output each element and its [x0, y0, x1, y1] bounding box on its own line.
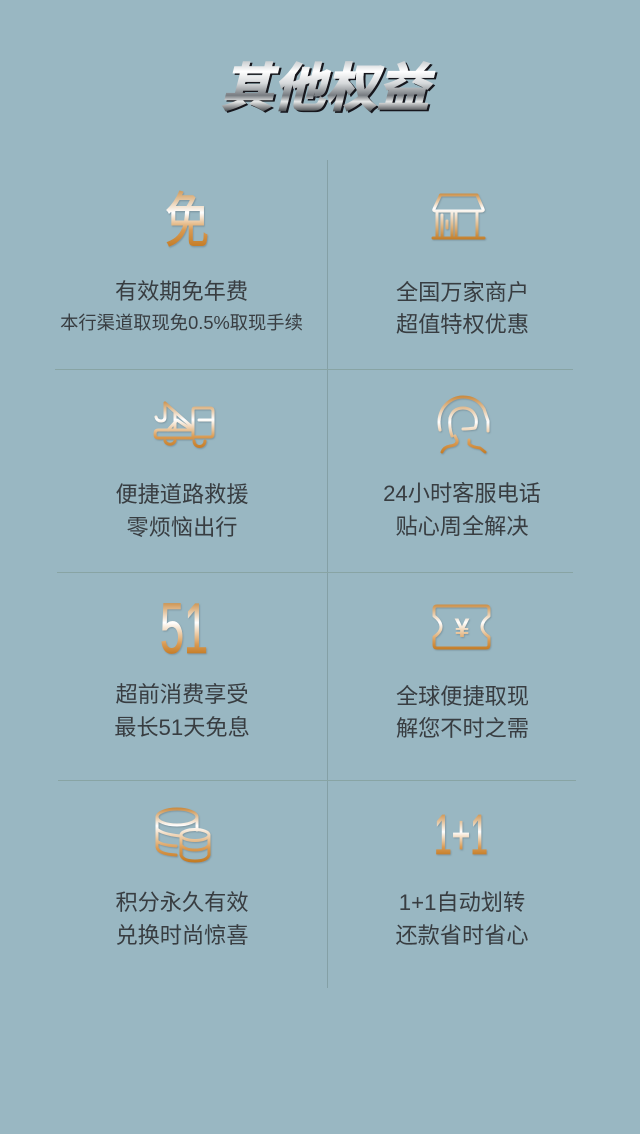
icon: storefront — [433, 195, 484, 238]
text: auto repayment: 还款省时省心 — [395, 923, 529, 948]
text: roadside rescue — [115, 482, 249, 540]
text: customer service: 贴心周全解决 — [395, 514, 529, 539]
text: annual fee waiver: 本行渠道取现免0.5%取现手续 — [60, 312, 303, 333]
text: points — [115, 890, 249, 948]
icon: yen ticket: ¥ — [454, 613, 470, 643]
text: auto repayment: 1+1自动划转 — [399, 890, 525, 915]
text: interest free: 超前消费享受 — [115, 682, 249, 707]
panel: auto repayment — [395, 803, 529, 948]
text: points: 兑换时尚惊喜 — [115, 923, 249, 948]
text: interest free: 最长51天免息 — [114, 715, 250, 740]
title: 其他权益 — [218, 60, 441, 118]
panel: annual fee waiver — [60, 188, 303, 333]
text: roadside rescue: 零烦恼出行 — [127, 515, 237, 540]
text: interest free — [114, 682, 250, 740]
panel: customer service — [383, 397, 541, 539]
text: annual fee waiver — [60, 279, 303, 333]
panel: merchants — [396, 195, 529, 337]
text: global withdrawal: 全球便捷取现 — [396, 684, 529, 709]
text: merchants: 全国万家商户 — [396, 280, 529, 305]
panel: roadside rescue — [115, 403, 249, 540]
text: customer service: 24小时客服电话 — [383, 481, 541, 506]
panel: points — [115, 809, 249, 948]
text: roadside rescue: 便捷道路救援 — [115, 482, 249, 507]
icon: tow truck — [155, 403, 213, 447]
text: annual fee waiver: 有效期免年费 — [115, 279, 248, 304]
icon: 51 days: 51 — [160, 590, 208, 669]
icon: 1+1: 1+1 — [434, 803, 488, 867]
icon: coin stacks — [157, 809, 209, 861]
text: merchants: 超值特权优惠 — [396, 312, 529, 337]
text: merchants — [396, 280, 529, 337]
text: global withdrawal: 解您不时之需 — [396, 716, 529, 741]
text: auto repayment — [395, 890, 529, 948]
panel: global withdrawal — [396, 606, 529, 741]
text: global withdrawal — [396, 684, 529, 741]
icon: headset agent — [439, 397, 488, 452]
text: points: 积分永久有效 — [115, 890, 249, 915]
text: customer service — [383, 481, 541, 539]
icon: free character: 免 — [165, 188, 209, 256]
panel: interest free — [114, 590, 250, 740]
